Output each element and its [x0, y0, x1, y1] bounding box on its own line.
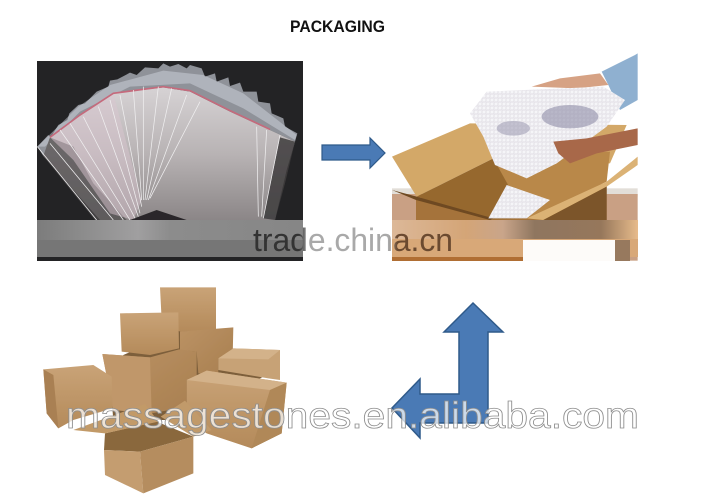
bag bodies — [43, 87, 295, 220]
watermark band on carton — [392, 220, 638, 239]
box: big centre — [102, 349, 197, 413]
watermark band on bags — [37, 220, 303, 240]
box: right large — [187, 371, 287, 448]
box: upper left — [120, 312, 179, 355]
box: right small — [218, 348, 280, 380]
watermark: trade.china.cn: trade.china.cn — [253, 222, 453, 258]
box: open front — [104, 422, 193, 452]
photo: stack of cardboard boxes — [43, 287, 287, 493]
bag flaps — [37, 63, 297, 156]
arrow: elbow up and left — [392, 303, 503, 438]
title: PACKAGING — [290, 17, 385, 36]
arrow: right — [322, 138, 385, 168]
box: second — [180, 327, 233, 375]
box: top — [160, 287, 216, 332]
photo: clear cellophane bags — [37, 61, 303, 261]
watermark: massagestones.en.alibaba.com: massagestones.en.alibaba.com — [66, 395, 639, 436]
box: left — [43, 365, 113, 428]
photo: bubble wrap in carton — [392, 53, 638, 261]
